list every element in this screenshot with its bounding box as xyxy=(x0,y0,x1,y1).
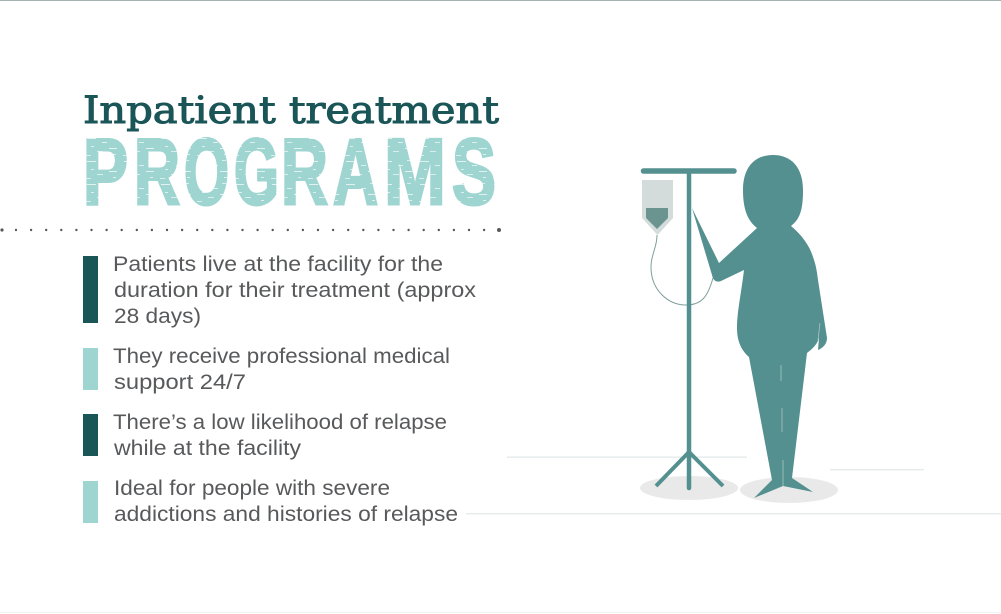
heading: PROGRAMS: P xyxy=(83,119,128,224)
IV bag xyxy=(642,180,673,235)
bullet: live at the facility: duration for their treatment (approx xyxy=(114,279,477,302)
bullet: live at the facility: Patients live at the facility for the xyxy=(113,253,443,276)
top edge strip xyxy=(0,0,1001,1)
heading: PROGRAMS: R xyxy=(281,119,328,224)
bullet: low likelihood of relapse: while at the facility xyxy=(113,437,302,460)
IV tube xyxy=(651,235,713,305)
bottom edge line xyxy=(0,612,1001,613)
floor lines xyxy=(466,456,1001,514)
heading: PROGRAMS: O xyxy=(184,119,229,224)
bullet: live at the facility: 28 days) xyxy=(114,305,201,328)
bullet: low likelihood of relapse xyxy=(83,411,447,460)
heading: PROGRAMS: A xyxy=(333,119,378,224)
heading: PROGRAMS: R xyxy=(134,119,180,224)
bullet: ideal for severe addictions xyxy=(83,477,458,526)
icon: patient silhouette xyxy=(692,155,827,498)
heading: PROGRAMS: S xyxy=(452,119,496,224)
bullet: medical support: They receive professional medical xyxy=(113,345,450,368)
stand pole and base xyxy=(644,171,734,488)
title: Inpatient treatment: Inpatient treatment xyxy=(83,89,499,132)
bullet: ideal for severe addictions: Ideal for people with severe xyxy=(114,477,390,500)
heading: PROGRAMS: G xyxy=(234,119,279,224)
bullet: medical support: support 24/7 xyxy=(114,371,246,394)
floor shadows xyxy=(640,476,838,503)
bullet: ideal for severe addictions: addictions and histories of relapse xyxy=(114,503,458,526)
arm gap and leg seam xyxy=(781,323,820,486)
bullet: medical support xyxy=(83,345,450,394)
heading: PROGRAMS xyxy=(83,119,497,224)
bullet: low likelihood of relapse: There’s a low likelihood of relapse xyxy=(113,411,447,434)
icon: IV drip stand xyxy=(642,171,734,488)
heading: PROGRAMS: M xyxy=(384,119,446,224)
bullet: live at the facility xyxy=(83,253,477,328)
IV bag fluid xyxy=(646,208,668,229)
dotted divider xyxy=(0,228,501,232)
